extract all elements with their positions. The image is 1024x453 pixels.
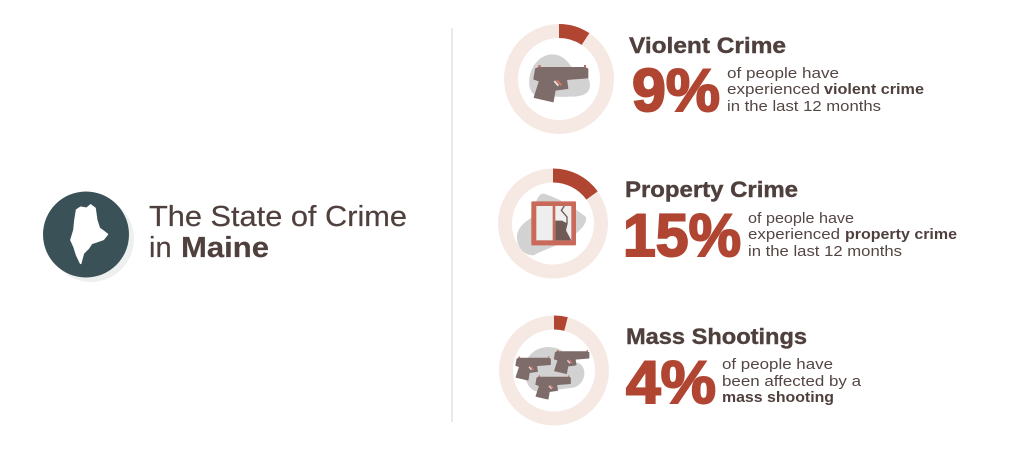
donut chart: 15% (505, 176, 601, 272)
icon: handgun (529, 54, 590, 102)
panel: property crime (505, 176, 957, 272)
panel: mass shootings (506, 322, 862, 418)
description: mass shooting (722, 389, 834, 406)
donut chart: 4% (506, 322, 602, 418)
heading: Violent Crime (629, 33, 786, 58)
description: of people have (727, 65, 839, 82)
stat: 9%: 9% (632, 57, 720, 124)
stat: 15%: 15% (623, 202, 741, 269)
description: experienced (727, 81, 820, 98)
donut chart: 9% (511, 31, 607, 127)
heading: Mass Shootings (626, 324, 807, 349)
description: in the last 12 months (748, 243, 902, 260)
description: of people have (722, 356, 833, 373)
title: in (149, 232, 180, 264)
description: violent crime (824, 81, 924, 98)
title: Maine (181, 232, 269, 264)
icon: three handguns (516, 347, 589, 399)
panel: state title (43, 192, 407, 282)
icon: broken window (517, 194, 586, 255)
stat: 4%: 4% (626, 349, 716, 416)
description: of people have (748, 210, 854, 227)
title: The State of Crime (149, 201, 407, 233)
heading: Property Crime (625, 177, 798, 202)
description: been affected by a (722, 373, 862, 390)
description: property crime (845, 226, 957, 243)
panel: violent crime (511, 31, 924, 127)
description: in the last 12 months (727, 98, 881, 115)
description: experienced (748, 226, 840, 243)
icon: Maine map badge (43, 192, 134, 282)
